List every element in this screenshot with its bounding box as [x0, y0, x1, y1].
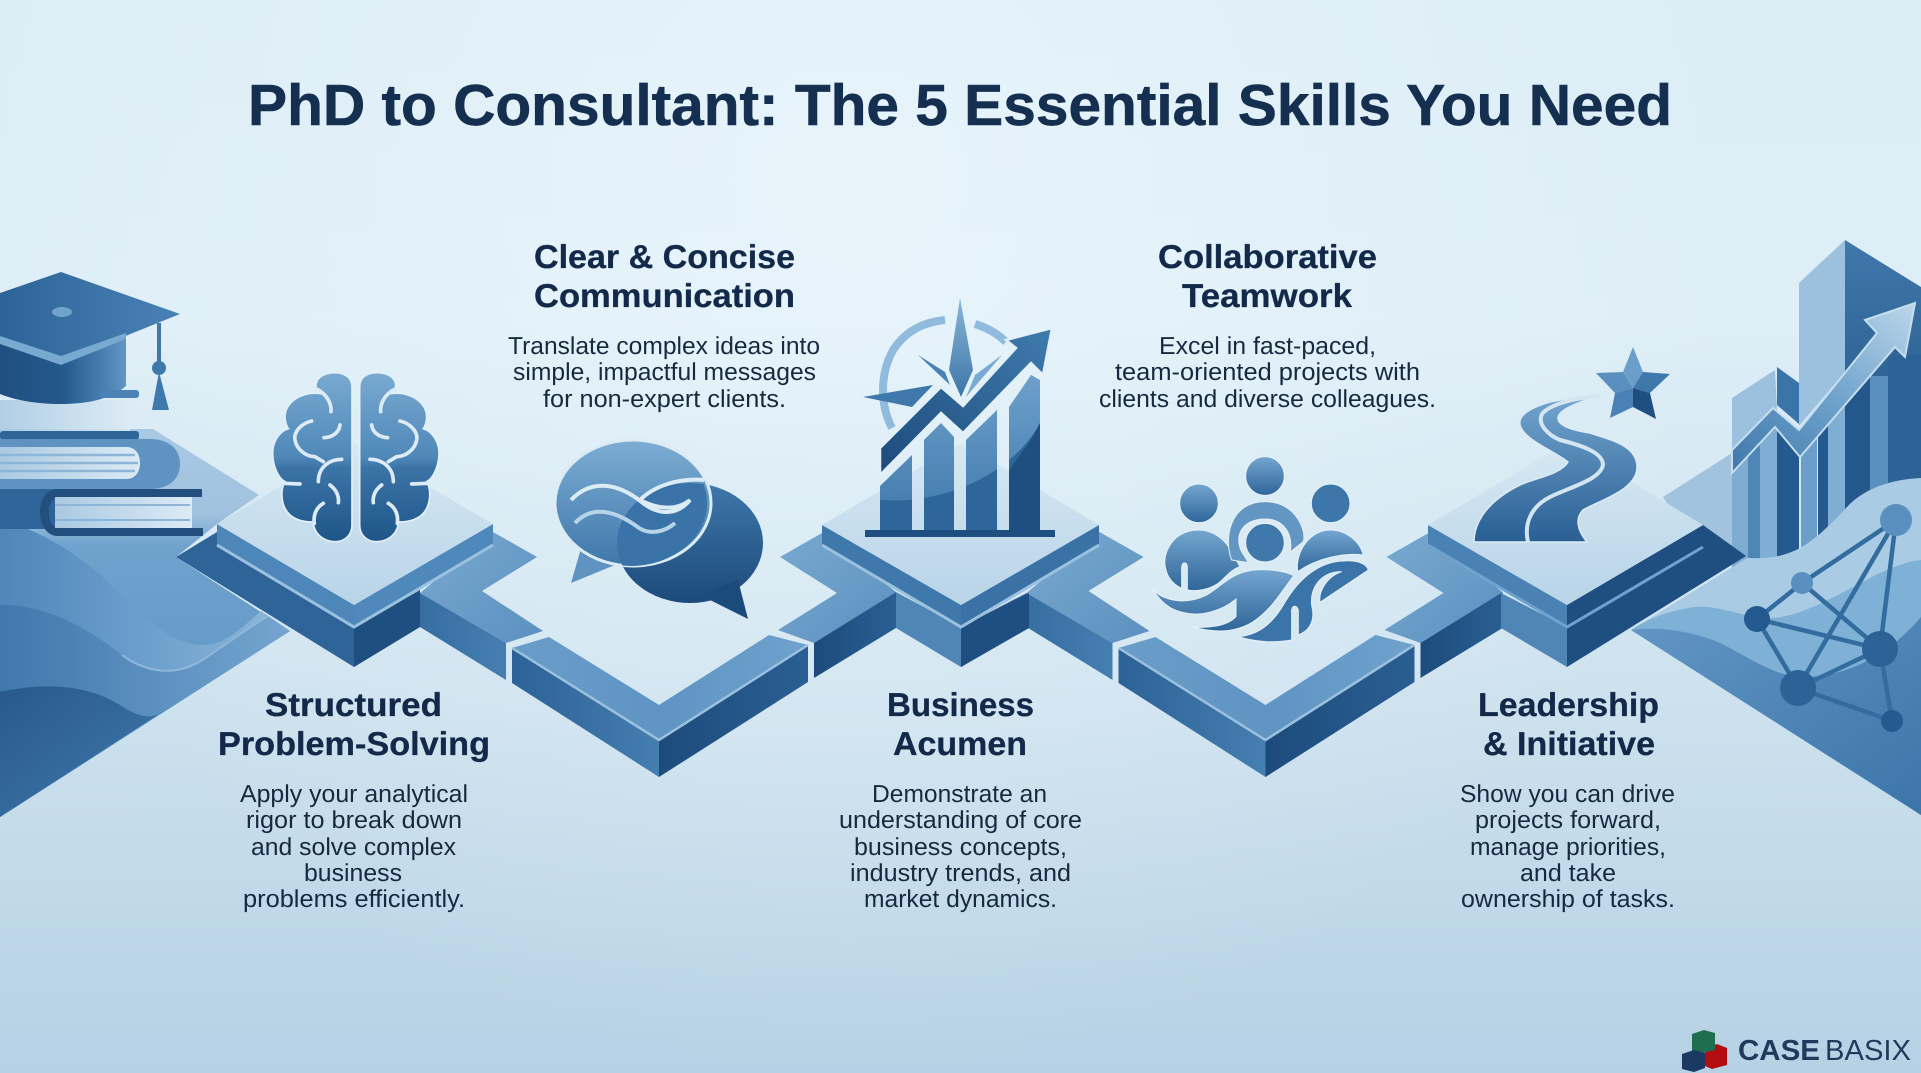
right scenery: skyline and growth arrow [1663, 240, 1921, 570]
text block: clear and concise communication: simple, impactful messages [513, 359, 816, 386]
platform: step 1 [176, 443, 493, 667]
text block: business acumen [839, 686, 1082, 913]
text block: clear and concise communication: Translate complex ideas into [508, 333, 820, 360]
path: connector between step 2 and step 3 [961, 532, 1502, 777]
text block: leadership and initiative: & Initiative [1483, 725, 1655, 762]
platform: step 2 [822, 443, 1099, 667]
text block: collaborative teamwork [1099, 238, 1436, 413]
icon: winding road and star [1474, 347, 1670, 542]
text block: business acumen: industry trends, and [850, 860, 1071, 887]
icon: team of people [1152, 457, 1368, 642]
text block: collaborative teamwork: Teamwork [1182, 277, 1353, 314]
logo: casebasix: BASIX [1825, 1035, 1911, 1067]
text block: collaborative teamwork: Excel in fast-paced, [1159, 333, 1376, 360]
path: connector between step 1 and step 2 [354, 532, 896, 777]
text block: business acumen: understanding of core [839, 807, 1082, 834]
text block: collaborative teamwork: Collaborative [1158, 238, 1377, 275]
text block: clear and concise communication [508, 238, 820, 413]
right scenery: layered hills [1631, 478, 1921, 815]
text block: structured problem-solving: Structured [265, 686, 442, 723]
icon: network graph [1744, 504, 1912, 732]
text block: leadership and initiative: projects forward, [1475, 807, 1661, 834]
text block: business acumen: market dynamics. [864, 886, 1057, 913]
text block: structured problem-solving: and solve complex [251, 834, 456, 861]
text block: leadership and initiative: Leadership [1478, 686, 1659, 723]
icon: brain [273, 373, 439, 542]
text block: clear and concise communication: for non-expert clients. [543, 386, 786, 413]
text block: structured problem-solving: Problem-Solving [218, 725, 490, 762]
text block: structured problem-solving: problems efficiently. [243, 886, 465, 913]
icon: compass and growth chart [863, 298, 1055, 537]
text block: leadership and initiative: ownership of tasks. [1461, 886, 1675, 913]
icon: speech bubbles [555, 440, 763, 619]
logo: casebasix [1682, 1030, 1911, 1072]
text block: leadership and initiative: manage priorities, [1470, 834, 1666, 861]
text block: business acumen: business concepts, [854, 834, 1067, 861]
text block: collaborative teamwork: team-oriented projects with [1115, 359, 1420, 386]
text block: structured problem-solving: Apply your analytical [240, 781, 468, 808]
left scenery: waves [0, 429, 290, 817]
text block: leadership and initiative [1460, 686, 1675, 913]
logo: casebasix: CASE [1738, 1035, 1820, 1067]
text block: collaborative teamwork: clients and diverse colleagues. [1099, 386, 1436, 413]
icon: graduation cap and books [0, 272, 203, 536]
text block: business acumen: Business [887, 686, 1034, 723]
title: PhD to Consultant: The 5 Essential Skills You Need [248, 73, 1672, 138]
text block: structured problem-solving: business [304, 860, 402, 887]
text block: leadership and initiative: Show you can drive [1460, 781, 1675, 808]
text block: structured problem-solving [218, 686, 490, 913]
text block: business acumen: Demonstrate an [872, 781, 1047, 808]
text block: leadership and initiative: and take [1520, 860, 1616, 887]
text block: business acumen: Acumen [893, 725, 1027, 762]
platform: step 3 [1428, 443, 1746, 667]
text block: clear and concise communication: Clear & Concise [534, 238, 795, 275]
text block: structured problem-solving: rigor to break down [246, 807, 462, 834]
text block: clear and concise communication: Communication [534, 277, 795, 314]
